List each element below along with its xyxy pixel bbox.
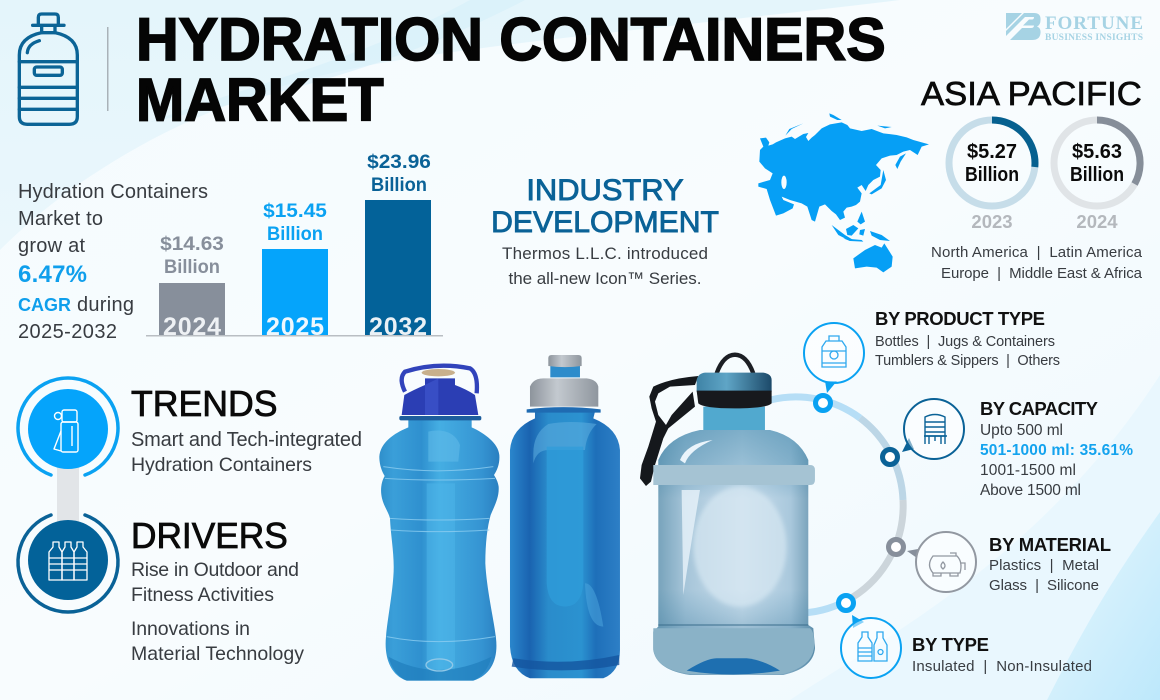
- connector: trends to drivers: [57, 465, 79, 525]
- segment: by capacity: [980, 398, 1133, 499]
- industry development: INDUSTRY: [526, 173, 684, 207]
- text: CAGR statement: during: [77, 294, 134, 316]
- divider: [107, 27, 108, 111]
- bar 2024: $14.63: [160, 234, 224, 255]
- icon: water jug: [19, 14, 77, 124]
- icon bubble: material: [907, 532, 976, 592]
- text: CAGR statement: Hydration Containers: [18, 181, 208, 203]
- icon: drivers badge: [18, 515, 118, 612]
- industry development: DEVELOPMENT: [491, 206, 719, 239]
- donut 2024: $5.63: [1072, 141, 1122, 163]
- donut 2023: $5.27: [967, 141, 1017, 163]
- trends text: TRENDS: [131, 384, 278, 424]
- bar 2032: Billion: [371, 175, 427, 196]
- title: [136, 6, 886, 134]
- segment: by product type: [875, 308, 1060, 369]
- bottle: middle blue silver cap: [510, 355, 620, 678]
- donut 2023: Billion: [965, 164, 1019, 186]
- segment: by material: BY MATERIAL: [989, 534, 1111, 555]
- segment: by material: Plastics | Metal: [989, 557, 1099, 574]
- industry development: the all-new Icon™ Series.: [508, 269, 702, 288]
- text: CAGR statement: CAGR: [18, 295, 71, 315]
- icon bubble: type: [841, 615, 901, 678]
- drivers text: Material Technology: [131, 643, 304, 665]
- title: HYDRATION CONTAINERS: [136, 6, 886, 73]
- text: CAGR statement: 6.47%: [18, 261, 87, 288]
- trends text: Hydration Containers: [131, 454, 312, 476]
- trends text: Smart and Tech-integrated: [131, 429, 362, 451]
- trends text: [131, 384, 362, 476]
- icon bubble: product type: [804, 323, 864, 393]
- text: CAGR statement: grow at: [18, 235, 85, 257]
- bar chart: [146, 152, 443, 341]
- donut 2024: [1054, 120, 1140, 232]
- heading: Asia Pacific: ASIA PACIFIC: [921, 76, 1142, 113]
- industry development: Thermos L.L.C. introduced: [502, 244, 708, 263]
- segment: by type: [912, 634, 1092, 675]
- node: material: [888, 540, 904, 554]
- segment: by capacity: BY CAPACITY: [980, 398, 1099, 419]
- segment: by capacity: Above 1500 ml: [980, 482, 1081, 499]
- bar 2032: [365, 152, 431, 341]
- logo: Fortune Business Insights: [1006, 13, 1143, 43]
- segment: by capacity: Upto 500 ml: [980, 422, 1063, 439]
- icon: trends badge: [18, 378, 118, 475]
- drivers text: [131, 516, 304, 665]
- icon bubble: capacity: [902, 399, 964, 459]
- bar 2025: 2025: [266, 313, 324, 341]
- segment: by product type: Bottles | Jugs & Containers: [875, 334, 1055, 350]
- map: Asia Pacific: [758, 113, 929, 272]
- bar 2024: [159, 234, 225, 341]
- regions list: North America | Latin America: [931, 244, 1143, 261]
- donut 2023: [949, 120, 1035, 232]
- segment: by capacity: 1001-1500 ml: [980, 462, 1076, 479]
- bar 2032: $23.96: [367, 152, 431, 173]
- segment: by product type: BY PRODUCT TYPE: [875, 308, 1045, 329]
- bar 2025: $15.45: [263, 201, 327, 222]
- drivers text: Innovations in: [131, 618, 250, 640]
- node: product type: [816, 396, 830, 410]
- node: type: [838, 596, 854, 610]
- drivers text: DRIVERS: [131, 516, 288, 556]
- donut 2024: 2024: [1076, 211, 1118, 232]
- segment: by type: Insulated | Non-Insulated: [912, 658, 1092, 675]
- donut 2024: Billion: [1070, 164, 1124, 186]
- bar 2032: 2032: [369, 313, 427, 341]
- drivers text: Fitness Activities: [131, 584, 274, 606]
- text: CAGR statement: Market to: [18, 208, 103, 230]
- bottle: right large jug: [640, 355, 815, 675]
- segment arc: [770, 397, 903, 613]
- node: capacity: [882, 450, 898, 464]
- bottle: left blue handled: [379, 366, 499, 681]
- logo: Fortune Business Insights: FORTUNE: [1045, 13, 1143, 34]
- bar 2024: Billion: [164, 257, 220, 278]
- bar 2025: Billion: [267, 224, 323, 245]
- segment: by material: [989, 534, 1111, 594]
- bar 2024: 2024: [163, 313, 221, 341]
- text: CAGR statement: 2025-2032: [18, 321, 117, 343]
- regions list: Europe | Middle East & Africa: [941, 265, 1143, 282]
- industry development: [491, 173, 719, 288]
- logo: Fortune Business Insights: BUSINESS INSIGHTS: [1045, 33, 1143, 43]
- regions list: [931, 244, 1143, 282]
- segment: by material: Glass | Silicone: [989, 577, 1099, 594]
- segment: by type: BY TYPE: [912, 634, 989, 655]
- segment: by product type: Tumblers & Sippers | Others: [875, 353, 1060, 369]
- segment: by capacity: 501-1000 ml: 35.61%: [980, 442, 1133, 459]
- donut 2023: 2023: [971, 211, 1013, 232]
- text: CAGR statement: [18, 181, 208, 343]
- drivers text: Rise in Outdoor and: [131, 559, 299, 581]
- title: MARKET: [136, 68, 384, 134]
- bar 2025: [262, 201, 328, 341]
